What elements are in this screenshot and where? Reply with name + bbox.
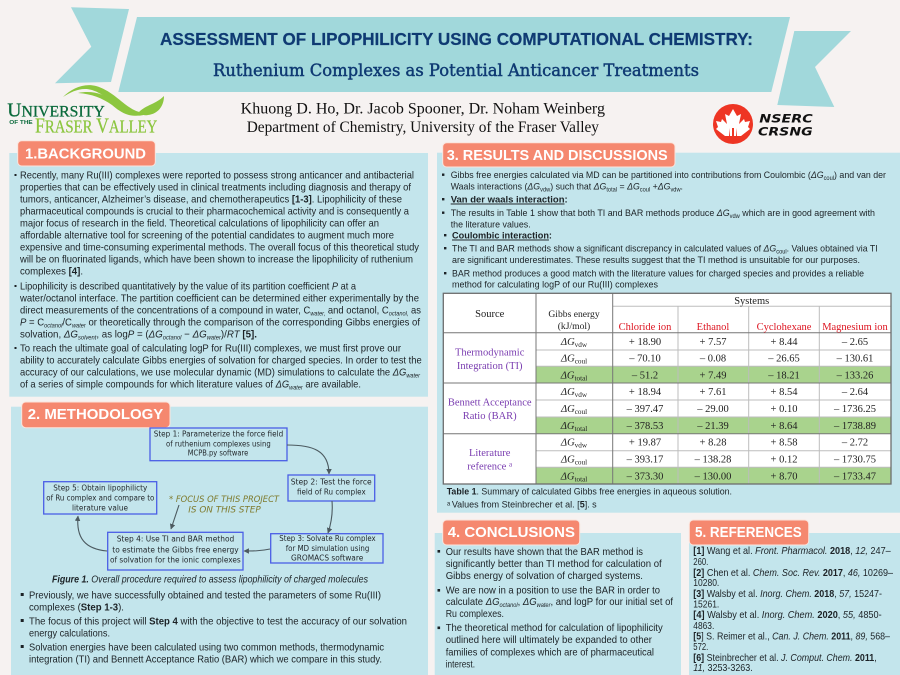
- background text: ability to accurately calculate Gibbs energies of solvation for charged species. In order to test the: [20, 356, 422, 366]
- step 3: for MD simulation using: [286, 544, 369, 553]
- results text: Coulombic interaction:: [452, 230, 552, 242]
- conclusions text: We are now in a position to use the BAR in order to: [446, 586, 660, 596]
- step 2: [288, 475, 375, 501]
- references panel box: [689, 533, 900, 675]
- table values: + 8.70: [771, 471, 797, 482]
- table values: – 130.61: [836, 354, 873, 365]
- title: ASSESSMENT OF LIPOPHILICITY USING COMPUTATIONAL CHEMISTRY:: [160, 29, 753, 49]
- background text: as: [408, 306, 421, 316]
- table headers: Systems: [734, 296, 769, 307]
- step 5: literature value: [72, 504, 128, 513]
- flowchart: [44, 428, 383, 570]
- step 5: [44, 482, 157, 514]
- reference list: [3] Walsby et al. Inorg. Chem. 2018, 57, 15247-: [693, 589, 882, 600]
- results text: coul: [824, 175, 834, 182]
- table energy terms: ΔG: [560, 337, 575, 348]
- background text: water: [207, 335, 222, 342]
- heading: methodology: [22, 402, 170, 428]
- results text: =: [617, 182, 627, 192]
- results text: ΔG: [657, 182, 671, 192]
- conclusions text: outlined here will ultimately be expanded to other: [446, 635, 652, 646]
- table values: + 19.87: [629, 438, 661, 449]
- conclusions text: calculate ΔG: [446, 597, 501, 608]
- step 1: MCPB.py software: [188, 448, 248, 457]
- table values: – 1736.25: [833, 404, 876, 415]
- methodology text: complexes (Step 1-3).: [29, 602, 124, 614]
- methodology text: energy calculations.: [29, 628, 110, 640]
- background text: complexes [4].: [20, 267, 83, 278]
- step 2: Step 2: Test the force: [291, 478, 372, 487]
- table energy terms: ΔG: [560, 471, 575, 482]
- table values: – 1733.47: [833, 471, 876, 482]
- conclusions text: ΔG: [522, 597, 537, 608]
- logo: University of the Fraser Valley: OF THE: [9, 120, 33, 126]
- heading: references: 5. REFERENCES: [695, 524, 802, 541]
- table energy terms: ΔG: [560, 354, 575, 365]
- table headers: Chloride ion: [619, 322, 672, 333]
- background text: affordable alternative tool for screening of the potential candidates to augment much more: [20, 230, 394, 242]
- background text: /C: [62, 318, 72, 329]
- reference list: 10280.: [693, 578, 719, 589]
- conclusions text: families of complexes which are of pharmaceutical: [446, 648, 654, 658]
- table values: + 7.61: [700, 387, 726, 398]
- heading: results: 3. RESULTS AND DISCUSSIONS: [447, 147, 668, 164]
- focus note: * FOCUS OF THIS PROJECT: [169, 495, 280, 505]
- logo: University of the Fraser Valley: FRASER VALLEY: [35, 113, 158, 137]
- results text: .: [681, 182, 683, 192]
- results text: The TI and BAR methods show a significant discrepancy in calculated values of ΔG: [452, 244, 789, 254]
- table values: – 21.39: [696, 421, 729, 432]
- table values: – 2.72: [841, 438, 868, 449]
- title banner: [55, 7, 851, 107]
- results bullets: [442, 174, 446, 274]
- table source labels: Literature: [469, 448, 511, 459]
- subtitle: Ruthenium Complexes as Potential Anticancer Treatments: [213, 61, 699, 80]
- table headers: Ethanol: [697, 322, 729, 333]
- background text: Lipophilicity is described quantitatively by the value of its partition coefficient P at a: [20, 282, 356, 292]
- background text: To reach the ultimate goal of calculating logP for Ru(III) complexes, we must first prove our: [20, 344, 401, 354]
- table values: + 8.44: [771, 337, 798, 348]
- heading: results: [443, 143, 675, 167]
- step 5: of Ru complex and compare to: [46, 494, 154, 503]
- heading: background: 1.BACKGROUND: [25, 145, 146, 162]
- background text: of a series of simple compounds for which literature values of ΔG: [20, 380, 301, 391]
- table values: + 8.58: [771, 438, 797, 449]
- background bullets: [14, 174, 16, 349]
- step 1: [150, 428, 287, 461]
- table values: + 7.57: [700, 337, 726, 348]
- table headers: (kJ/mol): [558, 321, 590, 332]
- reference list: [2] Chen et al. Chem. Soc. Rev. 2017, 46, 10269–: [693, 568, 893, 579]
- reference list: 11, 3253-3263.: [693, 663, 753, 674]
- results text: vdw: [540, 186, 551, 194]
- methodology text: Solvation energies have been calculated using two common methods, thermodynamic: [29, 642, 384, 654]
- table energy terms: ΔG: [560, 421, 575, 432]
- results text: . Values obtained via TI: [787, 244, 878, 254]
- arrow: step 1 to step 2: [287, 445, 329, 474]
- background text: octanol: [163, 335, 182, 342]
- step 4: of solvation for the ionic complexes: [110, 556, 241, 565]
- results text: The results in Table 1 show that both TI and BAR methods produce ΔG: [451, 208, 736, 219]
- conclusions text: interest.: [446, 660, 475, 670]
- table energy terms: vdw: [575, 442, 588, 450]
- results text: vdw: [730, 213, 740, 220]
- reference list: 4863.: [693, 621, 714, 632]
- ribbon tail right: [777, 31, 851, 107]
- step 3: GROMACS software: [291, 554, 363, 563]
- panel: methodology: [11, 402, 428, 675]
- step 2: field of Ru complex: [297, 488, 366, 497]
- table values: + 8.64: [771, 421, 798, 432]
- results text: the literature values.: [451, 220, 531, 230]
- background text: water,: [310, 310, 325, 318]
- conclusions text: Ru complexes.: [446, 609, 504, 620]
- focus note: [169, 495, 280, 516]
- conclusions text: Gibbs energy of solvation of charged systems.: [446, 571, 643, 582]
- results text: ) such that: [550, 182, 594, 192]
- table source labels: Ratio (BAR): [463, 411, 517, 422]
- table values: – 133.26: [836, 370, 873, 381]
- methodology text: [29, 590, 407, 666]
- table values: – 378.53: [626, 421, 663, 432]
- background text: −: [181, 330, 193, 341]
- authors and affiliation: [241, 100, 605, 136]
- background text: accuracy of our calculations, we use molecular dynamic (MD) simulations to calculate the ΔG: [20, 368, 430, 378]
- background text: expensive and time-consuming experimental methods. The overall focus of this theoretical study: [20, 242, 420, 254]
- results text: ) and van der: [834, 170, 887, 181]
- methodology text: integration (TI) and Bennett Acceptance Ratio (BAR) which we compare in this study.: [29, 654, 382, 666]
- table energy terms: ΔG: [560, 370, 575, 381]
- table values: – 29.00: [696, 404, 729, 415]
- background text: pharmaceutical compounds is crucial to their pharmacochemical activity and is consequently a: [20, 206, 409, 217]
- authors and affiliation: Khuong D. Ho, Dr. Jacob Spooner, Dr. Noham Weinberg: [241, 100, 605, 117]
- background text: octanol,: [389, 310, 408, 318]
- results text: Gibbs free energies calculated via MD can be partitioned into contributions from Coulombic (ΔG: [451, 170, 843, 181]
- table energy terms: ΔG: [560, 404, 575, 415]
- step 4: Step 4: Use TI and BAR method: [117, 535, 234, 544]
- table energy terms: total: [574, 475, 587, 483]
- panel: conclusions: [435, 520, 681, 675]
- table 1: [443, 293, 891, 484]
- step 5: Step 5: Obtain lipophilicty: [53, 483, 148, 492]
- table headers: Cyclohexane: [757, 322, 812, 333]
- reference list: 15261.: [693, 600, 719, 610]
- background text: or theoretically through the comparison of the corresponding Gibbs energies of: [86, 318, 420, 329]
- figure caption: Figure 1. Overall procedure required to assess lipophilicity of charged molecules: [52, 574, 368, 586]
- reference list: [6] Steinbrecher et al. J. Comput. Chem. 2011,: [693, 653, 877, 664]
- conclusions panel box: [435, 533, 681, 675]
- table energy terms: ΔG: [560, 455, 575, 466]
- results text: total: [606, 186, 617, 194]
- table headers: [475, 296, 889, 333]
- table values: + 18.90: [629, 337, 661, 348]
- table energy terms: total: [574, 425, 587, 433]
- background text: are available.: [303, 380, 361, 391]
- results text: Waals interactions (ΔG: [451, 182, 541, 192]
- table values: – 2.64: [841, 387, 869, 398]
- background text: water: [289, 385, 304, 392]
- table energy terms: ΔG: [560, 438, 575, 449]
- reference list: 572.: [693, 642, 708, 653]
- ribbon main: [118, 17, 790, 92]
- authors and affiliation: Department of Chemistry, University of the Fraser Valley: [247, 119, 599, 136]
- table values: – 138.28: [694, 455, 731, 466]
- table caption: Table 1. Summary of calculated Gibbs free energies in aqueous solution.: [447, 486, 732, 498]
- focus note: IS ON THIS STEP: [188, 506, 262, 516]
- table energy terms: total: [574, 374, 587, 382]
- logo: NSERC CRSNG: NSERC: [759, 112, 813, 126]
- table values: + 0.12: [771, 455, 797, 466]
- reference list: [4] Walsby et al. Inorg. Chem. 2020, 55, 4850-: [693, 610, 882, 621]
- conclusions text: [446, 547, 673, 670]
- results text: which are in good agreement with: [740, 208, 875, 219]
- background text: RT [5].: [227, 330, 258, 341]
- conclusions text: significantly better than TI method for calculation of: [446, 559, 662, 570]
- results text: coul: [776, 248, 787, 256]
- logo: University of the Fraser Valley: [7, 85, 164, 137]
- reference list: [1] Wang et al. Front. Pharmacol. 2018, 12, 247–: [693, 546, 891, 557]
- table values: – 393.17: [626, 455, 663, 466]
- table values: – 397.47: [626, 404, 663, 415]
- logo: University of the Fraser Valley: UNIVERSITY: [7, 100, 105, 122]
- table values: + 8.54: [771, 387, 798, 398]
- results text: BAR method produces a good match with the literature values for charged species and provides a reliable: [452, 268, 864, 280]
- panel: references: [689, 520, 900, 675]
- results text: ΔG: [626, 182, 640, 192]
- table energy terms: coul: [575, 408, 587, 416]
- background text: , as log: [96, 330, 128, 341]
- table energy terms: coul: [575, 459, 587, 467]
- background text: water: [72, 323, 87, 330]
- results text: Van der waals interaction:: [451, 194, 568, 206]
- arrow: step 2 to step 3: [328, 501, 332, 533]
- background text: octanol: [44, 323, 63, 330]
- ribbon tail left: [55, 7, 129, 83]
- step 1: Step 1: Parameterize the force field: [154, 430, 283, 438]
- panel: background: [9, 141, 428, 397]
- table headers: Source: [475, 309, 505, 320]
- arrow: step 3 to step 4: [244, 549, 270, 551]
- logo: NSERC CRSNG: CRSNG: [758, 125, 813, 139]
- table values: + 18.94: [629, 387, 662, 398]
- background text: tumors, anticancer, Alzheimer’s disease, and chemotherapeutics [1-3]. Lipophilicity of these: [20, 194, 402, 206]
- results text: are significant underestimates. These results suggest that the TI method is unsuitable for our purposes.: [452, 255, 860, 266]
- table source labels: Bennett Acceptance: [448, 398, 532, 408]
- heading: background: [18, 141, 155, 166]
- table headers: Gibbs energy: [548, 309, 600, 320]
- results text: method for calculating logP of our Ru(III) complexes: [452, 280, 658, 290]
- table energy terms: ΔG: [560, 387, 575, 398]
- results panel box: [437, 153, 900, 513]
- table caption: 5]. s: [580, 500, 597, 510]
- table values: + 7.49: [700, 370, 726, 381]
- table values: + 8.28: [700, 438, 726, 449]
- table values: – 18.21: [767, 370, 800, 381]
- background text: ΔG: [192, 330, 207, 341]
- table values: – 1738.89: [833, 421, 876, 432]
- conclusions text: Our results have shown that the BAR method is: [446, 547, 643, 558]
- table energy terms: [560, 337, 588, 483]
- arrow: step 4 to step 5: [78, 516, 107, 551]
- step 3: Step 3: Solvate Ru complex: [279, 534, 376, 543]
- table values: – 2.65: [841, 337, 868, 348]
- background panel box: [9, 153, 428, 397]
- background text: )/: [221, 330, 227, 341]
- panel: results and discussions: [437, 143, 900, 513]
- table source labels: Thermodynamic: [455, 348, 525, 358]
- background text: and octanol, C: [325, 306, 389, 316]
- table energy terms: coul: [575, 358, 587, 366]
- table source labels: [448, 348, 532, 472]
- background text: direct measurements of the concentrations of a compound in water, C: [20, 306, 340, 316]
- results text: ΔG: [593, 182, 607, 192]
- table energy terms: vdw: [575, 391, 588, 399]
- table source labels: reference: [467, 462, 506, 472]
- table headers: Magnesium ion: [822, 322, 889, 333]
- table caption: [447, 486, 732, 510]
- background text: P = C: [20, 318, 46, 329]
- background text: P = (ΔG: [128, 330, 164, 341]
- methodology panel box: [11, 407, 428, 675]
- logo: NSERC CRSNG: [713, 104, 813, 144]
- methodology bullets: [21, 593, 24, 648]
- table values: [626, 337, 876, 482]
- background text: [19, 170, 422, 392]
- heading: methodology: 2. METHODOLOGY: [28, 406, 163, 423]
- heading: conclusions: [443, 520, 580, 545]
- reference list: [693, 546, 893, 674]
- background text: solvent: [78, 335, 97, 342]
- conclusions text: ,: [518, 597, 523, 608]
- step 3: [271, 534, 383, 563]
- background text: water: [406, 372, 421, 380]
- conclusions text: The theoretical method for calculation of lipophilicity: [446, 623, 663, 634]
- methodology text: The focus of this project will Step 4 with the objective to test the accuracy of our solvation: [29, 616, 407, 628]
- conclusions text: , and logP for our initial set of: [550, 597, 673, 608]
- background text: properties that can be effectively used in clinical treatments including diagnosis and therapy of: [20, 183, 411, 194]
- background text: will be on fluorinated ligands, which have been shown to increase the lipophilicity of ruthenium: [19, 255, 413, 266]
- conclusions bullets: [438, 550, 440, 629]
- reference list: 260.: [693, 557, 708, 568]
- table values: – 373.30: [626, 471, 663, 482]
- table values: – 0.08: [699, 354, 726, 365]
- step 4: [108, 532, 243, 570]
- table source labels: Integration (TI): [457, 361, 523, 372]
- table values: – 51.2: [631, 370, 658, 381]
- background text: Recently, many Ru(III) complexes were reported to possess strong anticancer and antibacterial: [20, 170, 414, 182]
- heading: references: [689, 520, 809, 545]
- arrow: focus note to step 4: [171, 505, 179, 529]
- results text: coul: [640, 186, 650, 194]
- results text: [451, 170, 887, 290]
- table source labels: a: [509, 460, 513, 468]
- reference list: [5] S. Reimer et al., Can. J. Chem. 2011, 89, 568–: [693, 632, 890, 642]
- results text: +: [650, 182, 658, 192]
- table caption: a: [447, 500, 452, 508]
- table energy terms: vdw: [575, 341, 588, 349]
- background text: water/octanol interface. The partition coefficient can be determined either experimentally by the: [19, 294, 419, 304]
- background text: solvation, ΔG: [20, 330, 79, 341]
- table values: – 130.00: [694, 471, 731, 482]
- background text: major focus of research in the field. Theoretical calculations of lipophilicity can offer an: [20, 218, 379, 230]
- heading: conclusions: 4. CONCLUSIONS: [448, 524, 575, 541]
- step 1: of ruthenium complexes using: [166, 440, 271, 448]
- table values: – 26.65: [767, 354, 800, 365]
- step 4: to estimate the Gibbs free energy: [112, 545, 239, 554]
- table values: – 1730.75: [833, 455, 876, 466]
- conclusions text: octanol: [499, 602, 518, 609]
- table values: + 0.10: [771, 404, 797, 415]
- methodology text: Previously, we have successfully obtained and tested the parameters of some Ru(III): [29, 590, 381, 602]
- table caption: Values from Steinbrecher et al. [: [452, 500, 580, 510]
- results text: vdw: [670, 186, 681, 194]
- conclusions text: water: [537, 602, 551, 609]
- table values: – 70.10: [628, 354, 661, 365]
